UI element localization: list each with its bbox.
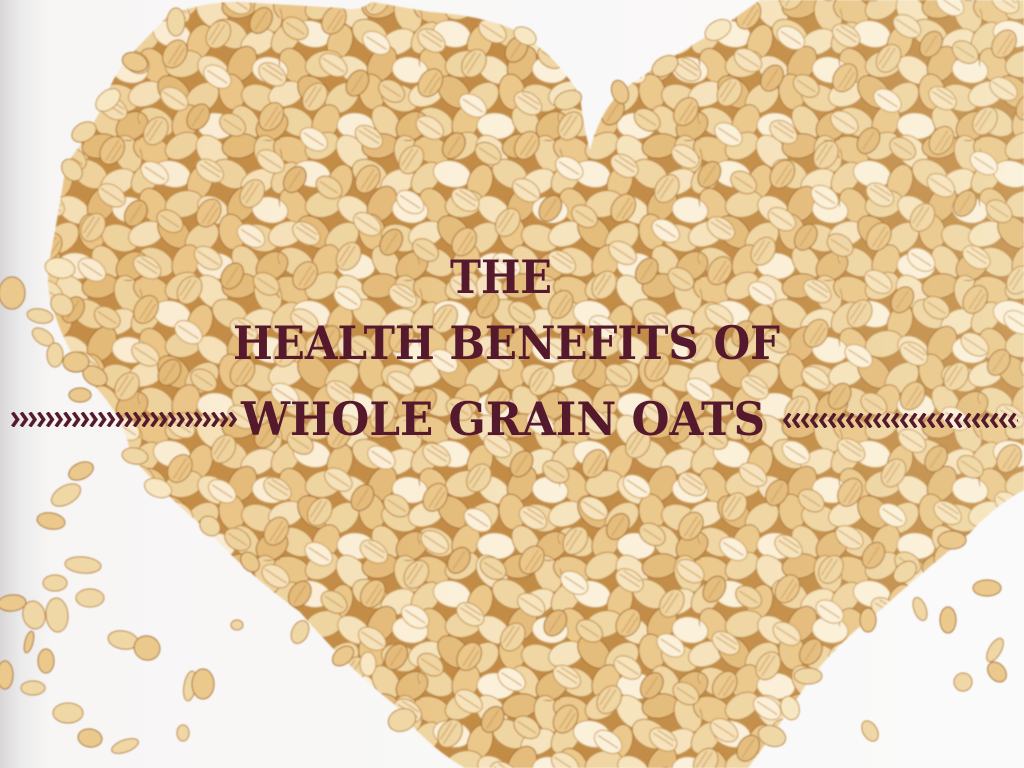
chevron divider: right xyxy=(783,413,1018,428)
title line: WHOLE GRAIN OATS: WHOLE GRAIN OATS xyxy=(240,392,765,446)
chevron divider: left xyxy=(11,412,237,427)
title xyxy=(233,250,780,446)
title line: THE: THE xyxy=(450,250,552,304)
title line: HEALTH BENEFITS OF: HEALTH BENEFITS OF xyxy=(233,316,780,370)
scattered flakes: right xyxy=(858,580,1010,744)
scattered flakes: left xyxy=(0,277,243,756)
